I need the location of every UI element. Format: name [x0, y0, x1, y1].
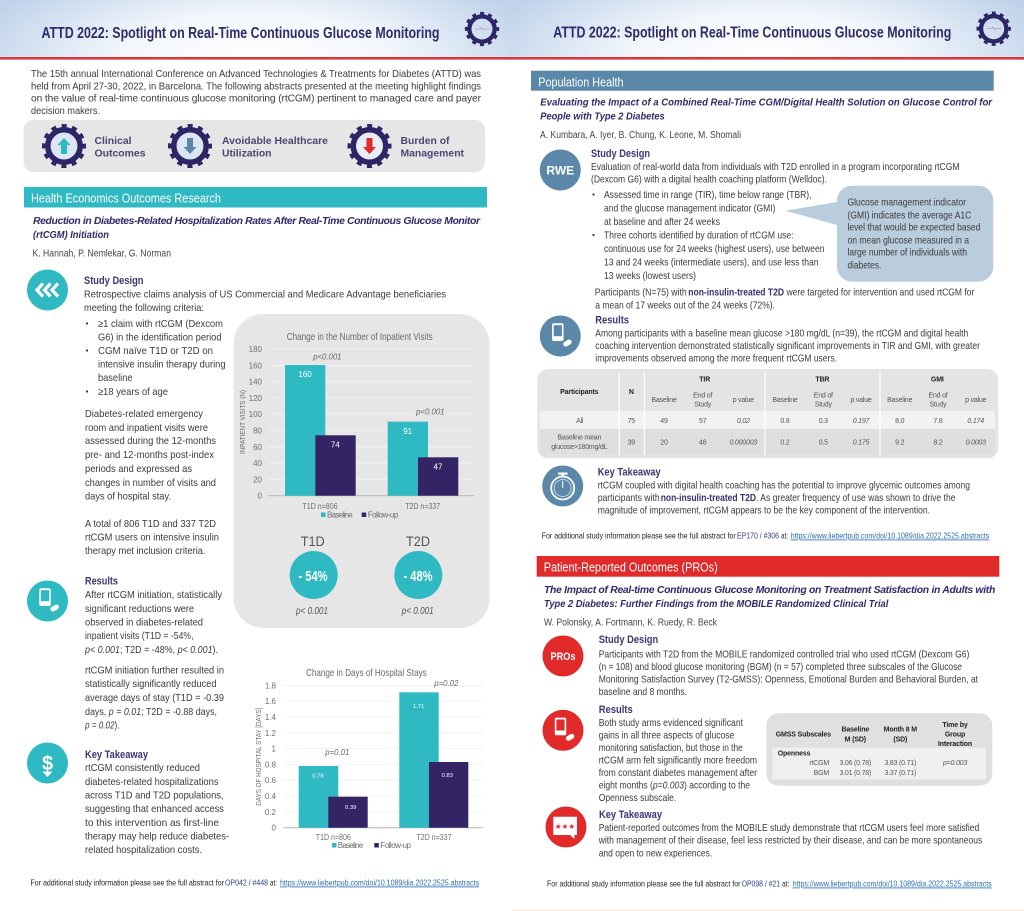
study design text — [591, 148, 960, 282]
study design text: ≥18 years of age — [98, 387, 168, 398]
icon: dollar down: $ — [42, 753, 53, 775]
intro paragraph — [31, 69, 482, 117]
bar chart: days of hospital stay: T1D n=806 — [316, 833, 351, 842]
study design text: 13 weeks (lowest users) — [604, 271, 696, 282]
label: clinical outcomes: Clinical — [94, 135, 132, 147]
authors: W. Polonsky, A. Fortmann, K. Ruedy, R. Beck — [544, 617, 717, 628]
T2D reduction callout: T2D — [406, 534, 430, 549]
T1D reduction callout — [290, 534, 338, 617]
bar chart: inpatient visits: 180 — [249, 345, 263, 354]
footnote: OP098: https://www.liebertpub.com/doi/10.1089/dia.2022.2525.abstracts — [793, 880, 992, 888]
footnote: OP098: For additional study information please see the full abstract for — [547, 880, 741, 888]
results text: monitoring satisfaction, but those in the — [599, 743, 743, 754]
study design text: days of hospital stay. — [85, 492, 171, 502]
table: TIR TBR GMI results: End of — [693, 392, 712, 400]
table: TIR TBR GMI results: Study — [694, 402, 712, 408]
intro paragraph: The 15th annual International Conference on Advanced Technologies & Treatments for Diabetes (ATTD) was — [31, 69, 481, 80]
footnote: OP042: at: — [270, 878, 277, 888]
study design text: Assessed time in range (TIR), time below range (TBR), — [604, 190, 812, 201]
study title: hospitalization: (rtCGM) Initiation — [33, 230, 109, 241]
bar chart: inpatient visits: 74 — [331, 440, 340, 450]
table: GMSS subscales: p=0.003 — [942, 760, 967, 767]
section heading: health economics — [24, 187, 487, 208]
footnote: EP170: EP170 / #306 — [737, 532, 779, 540]
footnote: OP098: at: — [782, 880, 790, 888]
bar chart: inpatient visits: 120 — [249, 394, 263, 403]
results text: Both study arms evidenced significant — [599, 718, 743, 729]
results text: rtCGM initiation further resulted in — [85, 666, 224, 676]
key takeaway text: non-insulin-treated T2D — [661, 493, 756, 504]
results text: Results — [85, 576, 118, 588]
study design text: Diabetes-related emergency — [85, 409, 204, 420]
table: GMSS subscales: Month 8 M — [884, 726, 917, 734]
key takeaway text: related hospitalization costs. — [85, 845, 202, 856]
study design text: Study Design — [591, 148, 650, 160]
study design text — [84, 275, 446, 557]
study design text: changes in number of visits and — [85, 478, 216, 489]
table: TIR TBR GMI results: All — [576, 418, 584, 425]
bar chart: inpatient visits: Follow-up — [368, 510, 399, 520]
icon: header gear — [466, 13, 498, 45]
study design text: pre- and 12-months post-index — [85, 450, 214, 461]
key takeaway text: participants with — [598, 493, 660, 504]
table: TIR TBR GMI results: 0.174 — [967, 418, 984, 425]
icon: healthcare utilization gear — [170, 126, 210, 166]
study design text: room and inpatient visits were — [85, 423, 208, 434]
section heading: population health — [531, 71, 994, 91]
results text: eight months (p=0.003) according to the — [599, 780, 750, 792]
results text: rtCGM arm felt significantly more freedom — [599, 756, 757, 767]
bar chart: inpatient visits: p<0.001 — [312, 352, 342, 362]
footnote: OP098 — [547, 880, 992, 888]
results text: inpatient visits (T1D = -54%, — [85, 631, 194, 642]
results text: average days of stay (T1D = -0.39 — [85, 693, 224, 704]
T2D reduction callout: p< 0.001 — [401, 606, 434, 617]
table: TIR TBR GMI results: 39 — [628, 440, 635, 447]
study design text: Retrospective claims analysis of US Commercial and Medicare Advantage beneficiaries — [84, 290, 446, 300]
bar chart: inpatient visits: 91 — [403, 427, 413, 436]
bar chart: inpatient visits: 40 — [253, 459, 263, 468]
label: burden of management — [400, 135, 464, 160]
table: TIR TBR GMI results: 0.0003 — [966, 440, 986, 447]
table: TIR TBR GMI results: End of — [928, 392, 948, 400]
study title: hospitalization — [33, 216, 481, 241]
key takeaway text: rtCGM consistently reduced — [85, 763, 200, 774]
bar chart: days of hospital stay: p=0.02 — [433, 679, 459, 688]
table: TIR TBR GMI results: 0.000003 — [729, 440, 757, 447]
key takeaway text: Key Takeaway — [598, 467, 661, 479]
footnote: OP042: For additional study information please see the full abstract for — [30, 878, 224, 888]
section heading: patient-reported outcomes: Patient-Reported Outcomes (PROs) — [544, 560, 718, 574]
bar chart: inpatient visits: INPATIENT VISITS (N) — [240, 390, 247, 454]
study title: digital health: Evaluating the Impact of a Combined Real-Time CGM/Digital Health Solution on Glucose Control for — [540, 98, 993, 109]
key takeaway text: suggesting that enhanced access — [85, 804, 224, 815]
table: GMSS subscales: 3.83 (0.71) — [884, 760, 916, 767]
results text: Openness subscale. — [599, 793, 676, 804]
results text — [84, 576, 224, 732]
T1D reduction callout: T1D — [301, 534, 325, 549]
key takeaway text: Key Takeaway — [599, 809, 662, 821]
study title: treatment satisfaction: The Impact of Real-time Continuous Glucose Monitoring on Treatment Satisfaction in Adults with — [544, 585, 995, 596]
study title: digital health — [540, 98, 993, 122]
table: TIR TBR GMI results: glucose>180mg/dL — [551, 444, 608, 451]
bar chart: days of hospital stay: 1.8 — [265, 681, 277, 690]
table: GMSS subscales: Baseline — [842, 726, 869, 734]
table: GMSS subscales: (SD) — [893, 736, 907, 744]
study design text: meeting the following criteria: — [84, 303, 204, 314]
table: TIR TBR GMI results: 49 — [660, 418, 668, 425]
table: TIR TBR GMI results: Study — [930, 402, 947, 408]
bar chart: days of hospital stay: 0.4 — [265, 792, 277, 801]
results text: days, p = 0.01; T2D = -0.88 days, — [85, 707, 217, 718]
results text: gains in all three aspects of glucose — [599, 731, 735, 742]
participants note: a mean of 17 weeks out of the 24 weeks (72%). — [595, 300, 775, 312]
bar chart: days of hospital stay — [254, 668, 483, 850]
bar chart: inpatient visits: 160 — [249, 361, 263, 370]
table: TIR TBR GMI results: 8.2 — [933, 440, 943, 447]
table: TIR TBR GMI results: Baseline — [651, 397, 677, 404]
icon: header gear — [978, 13, 1009, 44]
study design text: continuous use for 24 weeks (highest users), use between — [604, 244, 824, 255]
bar chart: inpatient visits: 100 — [249, 410, 263, 419]
table: TIR TBR GMI results: 0.175 — [853, 440, 870, 447]
bar chart: inpatient visits: 47 — [434, 462, 443, 472]
participants note — [595, 288, 975, 312]
study title: treatment satisfaction — [544, 585, 995, 610]
table: TIR TBR GMI results: Baseline — [772, 397, 798, 404]
table: TIR TBR GMI results: TBR — [815, 376, 829, 384]
results text: significant reductions were — [85, 604, 194, 615]
table: GMSS subscales: 3.06 (0.78) — [839, 760, 871, 767]
callout: glucose management indicator: large number of individuals with — [848, 248, 967, 259]
bar chart: inpatient visits — [240, 345, 474, 520]
key takeaway text — [85, 749, 229, 856]
key takeaway text: therapy may help reduce diabetes- — [85, 832, 229, 842]
table: GMSS subscales — [766, 713, 992, 786]
bar chart: days of hospital stay: Follow-up — [380, 841, 412, 850]
results text — [595, 314, 981, 364]
participants note: Participants (N=75) with — [595, 288, 687, 299]
T2D reduction callout — [394, 534, 442, 617]
right page header — [512, 0, 1024, 60]
table: TIR TBR GMI results: 20 — [660, 440, 668, 447]
study design text: 13 and 24 weeks (intermediate users), and use less than — [604, 258, 818, 268]
bar chart: days of hospital stay: DAYS OF HOSPITAL STAY [DAYS] — [254, 708, 263, 806]
bar chart: inpatient visits: 0 — [258, 492, 263, 501]
results text: observed in diabetes-related — [85, 618, 203, 628]
T2D reduction callout: - 48% — [404, 568, 432, 585]
results text: Results — [595, 314, 629, 326]
footnote: EP170: For additional study information please see the full abstract for — [542, 532, 736, 540]
table: GMSS subscales: Interaction — [938, 741, 972, 748]
bar chart: days of hospital stay: 0.2 — [265, 808, 277, 817]
results text — [599, 704, 758, 804]
intro paragraph: decision makers. — [31, 106, 100, 117]
table: TIR TBR GMI results: Participants — [560, 389, 599, 396]
icon: chat with stars: ★★★ — [555, 822, 575, 831]
table: TIR TBR GMI results: N — [629, 389, 634, 396]
label: burden of management: Management — [400, 148, 464, 160]
bar chart: inpatient visits: 60 — [253, 443, 263, 452]
table: GMSS subscales: BGM — [814, 770, 829, 777]
bar chart: days of hospital stay: 1.2 — [265, 729, 277, 738]
icon: phone and sensor, results — [542, 710, 584, 751]
bar chart: inpatient visits: 20 — [253, 475, 263, 484]
footnote: EP170: at: — [781, 532, 788, 540]
study design text: assessed during the 12-months — [85, 436, 216, 447]
bar chart: days of hospital stay: p=0.01 — [324, 748, 349, 757]
bar chart: days of hospital stay: 0 — [272, 824, 277, 833]
bar chart: days of hospital stay: 1.4 — [265, 713, 277, 722]
study design text: G6) in the identification period — [98, 332, 222, 344]
footnote: OP042: OP042 / #448 — [225, 878, 268, 888]
results text: from constant diabetes management after — [599, 768, 758, 779]
participants note: were targeted for intervention and used rtCGM for — [786, 288, 975, 299]
footnote: OP042: https://www.liebertpub.com/doi/10.1089/dia.2022.2525.abstracts — [280, 878, 479, 888]
intro paragraph: held from April 27-30, 2022, in Barcelona. The following abstracts presented at the meeting highlight findings — [31, 81, 481, 92]
bar chart: days of hospital stay: T2D n=337 — [416, 833, 452, 842]
table: TIR TBR GMI results: Baseline mean — [557, 434, 601, 442]
table: TIR TBR GMI results: 9.2 — [895, 440, 905, 447]
table: TIR TBR GMI results: 46 — [699, 440, 707, 447]
callout: glucose management indicator: on mean glucose measured in a — [848, 235, 969, 246]
key takeaway text: to this intervention as first-line — [85, 818, 219, 829]
study design text — [599, 634, 978, 698]
icon: chevrons — [27, 270, 68, 310]
table: GMSS subscales: M (SD) — [845, 736, 866, 744]
label: avoidable healthcare utilization: Utilization — [222, 148, 272, 160]
bar chart: days of hospital stay: 0.6 — [265, 776, 277, 785]
bar chart: days of hospital stay: 0.39 — [345, 805, 356, 811]
table: TIR TBR GMI results: 0.02 — [737, 418, 750, 425]
study design text: Three cohorts identified by duration of rtCGM use: — [604, 230, 794, 242]
study design text: rtCGM users on intensive insulin — [85, 532, 219, 544]
icon: phone and sensor, results — [27, 580, 68, 622]
study design text: ≥1 claim with rtCGM (Dexcom — [98, 319, 223, 330]
table: TIR TBR GMI results: 0.5 — [819, 440, 828, 447]
footnote: OP042 — [30, 878, 479, 888]
bar chart: inpatient visits: 160 — [298, 370, 312, 379]
label: avoidable healthcare utilization — [222, 135, 328, 160]
study design text: at baseline and after 24 weeks — [604, 217, 720, 228]
study design text: Evaluation of real-world data from individuals with T2D enrolled in a program incorporating rtCGM — [591, 162, 960, 173]
table: GMSS subscales: rtCGM — [809, 760, 829, 767]
results text: statistically significantly reduced — [85, 679, 217, 690]
bar chart: days of hospital stay: 0.83 — [442, 773, 453, 779]
authors: A. Kumbara, A. Iyer, B. Chung, K. Leone, M. Shomali — [540, 130, 741, 141]
study design text: (Dexcom G6) with a digital health coaching platform (Welldoc). — [591, 174, 827, 186]
label: burden of management: Burden of — [400, 135, 450, 147]
bar chart: days of hospital stay: 1 — [272, 745, 277, 754]
section heading: population health: Population Health — [538, 75, 624, 89]
table: GMSS subscales: 3.37 (0.71) — [884, 770, 916, 777]
results text: Results — [599, 704, 633, 716]
icon: clinical outcomes gear — [44, 126, 84, 166]
bar chart: inpatient visits: 140 — [249, 378, 263, 387]
table: GMSS subscales: GMSS Subscales — [776, 732, 831, 738]
table: TIR TBR GMI results: p value — [965, 397, 987, 404]
table: TIR TBR GMI results: p value — [733, 397, 754, 404]
label: clinical outcomes: Outcomes — [94, 148, 146, 160]
label: avoidable healthcare utilization: Avoidable Healthcare — [222, 135, 328, 147]
callout: glucose management indicator — [785, 186, 993, 282]
study design text: Study Design — [84, 275, 144, 287]
bar chart: days of hospital stay: 0.78 — [312, 774, 324, 780]
table: TIR TBR GMI results: GMI — [931, 376, 944, 384]
table: TIR TBR GMI results: 57 — [699, 418, 707, 425]
study title: hospitalization: Reduction in Diabetes-Related Hospitalization Rates After Real-Time Continuous Glucose Monitor — [33, 216, 481, 227]
icon: burden gear — [350, 126, 390, 166]
label: clinical outcomes — [94, 135, 146, 160]
table: GMSS subscales: Group — [945, 732, 965, 738]
table: GMSS subscales: Openness — [778, 750, 811, 758]
footnote: EP170: https://www.liebertpub.com/doi/10.1089/dia.2022.2525.abstracts — [791, 532, 989, 540]
key takeaway text: Key Takeaway — [85, 749, 148, 761]
table: TIR TBR GMI results: Baseline — [887, 397, 913, 404]
icon: dollar down — [27, 742, 68, 784]
bar chart: inpatient visits: T2D n=337 — [405, 502, 441, 511]
bar chart: inpatient visits: p<0.001 — [415, 408, 445, 416]
table: TIR TBR GMI results: 0.8 — [780, 418, 790, 425]
results text: improvements observed among the more frequent rtCGM users. — [595, 354, 837, 364]
study design text: Study Design — [599, 634, 658, 646]
table: TIR TBR GMI results: 0.2 — [780, 440, 790, 447]
bar chart: inpatient visits: T1D n=806 — [302, 502, 338, 511]
table: TIR TBR GMI results: 75 — [628, 418, 635, 425]
key takeaway text — [598, 467, 970, 517]
study title: treatment satisfaction: Type 2 Diabetes: Further Findings from the MOBILE Randomized Clinical Trial — [544, 599, 889, 610]
key takeaway text: and open to new experiences. — [599, 848, 712, 860]
bar chart: days of hospital stay: 0.8 — [265, 760, 277, 769]
study design text: intensive insulin therapy during — [98, 360, 226, 370]
icon: phone and sensor, results — [540, 316, 581, 356]
icon: PROs badge: PROs — [550, 651, 576, 663]
icon: chat with stars — [546, 806, 586, 848]
callout: glucose management indicator: diabetes. — [848, 260, 881, 271]
table: GMSS subscales: Time by — [942, 722, 968, 729]
callout: glucose management indicator: Glucose management indicator — [848, 198, 967, 209]
icon: stopwatch — [542, 466, 583, 506]
callout: glucose management indicator: level that would be expected based — [848, 223, 981, 234]
T1D reduction callout: - 54% — [298, 568, 328, 585]
study design text: baseline — [98, 373, 133, 384]
key takeaway text: . As greater frequency of use was shown to drive the — [756, 493, 956, 504]
left page title: ATTD 2022: Spotlight on Real-Time Continuous Glucose Monitoring — [42, 25, 440, 42]
results text: p< 0.001; T2D = -48%, p< 0.001). — [84, 645, 218, 656]
table: TIR TBR GMI results: 8.0 — [895, 418, 905, 425]
bar chart: inpatient visits: Baseline — [327, 510, 353, 520]
icon: PROs badge — [542, 636, 584, 676]
authors: K. Hannah, P. Nemlekar, G. Norman — [32, 248, 171, 260]
bar chart: days of hospital stay: 1.6 — [265, 697, 277, 706]
panel: inpatient visits chart — [234, 314, 490, 628]
table: TIR TBR GMI results: p value — [850, 397, 872, 404]
study design text: CGM naïve T1D or T2D on — [98, 346, 213, 357]
intro paragraph: on the value of real-time continuous glucose monitoring (rtCGM) pertinent to managed care and payer — [31, 94, 482, 105]
section heading: health economics: Health Economics Outcomes Research — [31, 192, 221, 206]
left page header — [0, 0, 512, 60]
key takeaway text: magnitude of improvement, rtCGM appears to be the key component of the intervention. — [598, 506, 930, 517]
results text: p = 0.02). — [84, 720, 120, 732]
callout: glucose management indicator: (GMI) indicates the average A1C — [848, 210, 971, 221]
T1D reduction callout: p< 0.001 — [295, 606, 328, 617]
results text: After rtCGM initiation, statistically — [85, 590, 223, 601]
table: TIR TBR GMI results — [537, 369, 998, 458]
chart title: Change in Days of Hospital Stays — [306, 668, 427, 679]
study design text: A total of 806 T1D and 337 T2D — [85, 519, 216, 530]
table: TIR TBR GMI results: TIR — [699, 376, 710, 384]
key takeaway text: across T1D and T2D populations, — [85, 790, 224, 802]
study title: digital health: People with Type 2 Diabetes — [540, 111, 665, 122]
icon: RWE badge: RWE — [546, 164, 574, 178]
icon: RWE badge — [540, 150, 581, 190]
panel: focus areas — [24, 120, 485, 172]
footnote: OP098: OP098 / #21 — [742, 880, 780, 888]
table: TIR TBR GMI results: 0.197 — [853, 418, 871, 425]
study design text: and the glucose management indicator (GMI) — [604, 204, 776, 214]
bar chart: days of hospital stay: Baseline — [338, 841, 364, 850]
table: TIR TBR GMI results: End of — [814, 392, 833, 400]
footnote: EP170 — [542, 532, 989, 540]
bar chart: inpatient visits: 80 — [253, 426, 263, 436]
section heading: patient-reported outcomes — [537, 556, 999, 577]
table: TIR TBR GMI results: Study — [815, 402, 832, 408]
key takeaway text — [598, 809, 982, 860]
table: TIR TBR GMI results: 7.8 — [933, 418, 943, 425]
study design text: therapy met inclusion criteria. — [85, 546, 206, 557]
participants note: non-insulin-treated T2D — [688, 288, 784, 299]
study design text: baseline and 8 months. — [599, 687, 687, 698]
chart title: Change in the Number of Inpatient Visits — [287, 332, 433, 343]
table: TIR TBR GMI results: 0.3 — [819, 418, 828, 425]
study design text: periods and expressed as — [85, 464, 192, 475]
key takeaway text: diabetes-related hospitalizations — [85, 777, 218, 788]
table: GMSS subscales: 3.01 (0.78) — [839, 770, 871, 777]
bar chart: days of hospital stay: 1.71 — [413, 704, 424, 710]
